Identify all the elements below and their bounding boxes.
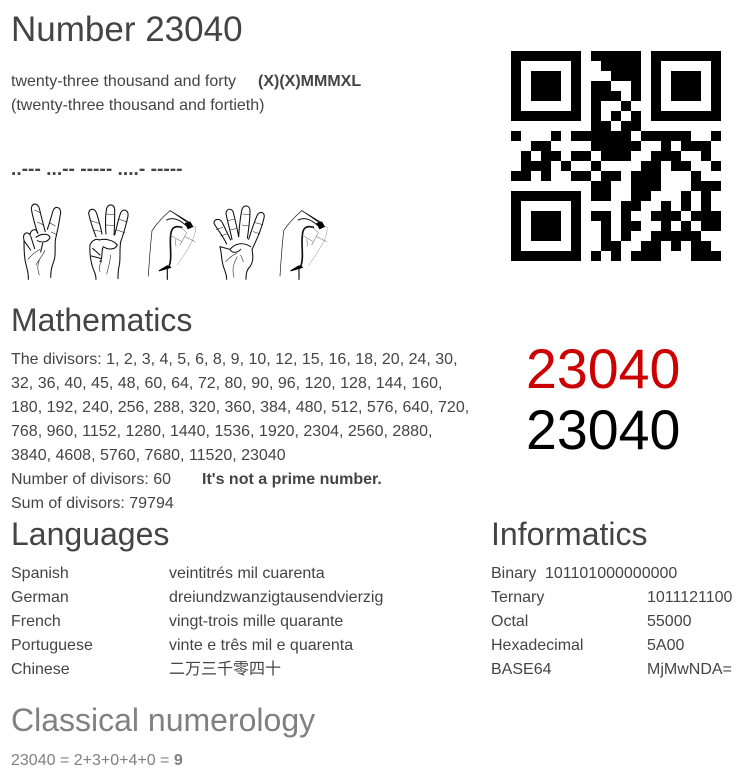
informatics table: Octal <box>491 613 528 630</box>
informatics table: 5A00 <box>647 637 684 654</box>
informatics table: BASE64 <box>491 661 551 678</box>
informatics table: Ternary <box>491 589 544 606</box>
languages table: Chinese <box>11 661 70 678</box>
languages table: German <box>11 589 69 606</box>
prime status: It's not a prime number. <box>202 471 382 488</box>
informatics table: 101101000000000 <box>545 565 677 582</box>
divisors list: 3840, 4608, 5760, 7680, 11520, 23040 <box>11 447 286 464</box>
hand sign: 2 <box>24 204 61 279</box>
hand sign: 0 (second) <box>280 211 327 279</box>
informatics table: Binary <box>491 565 536 582</box>
morse code: ..--- ...-- ----- ....- ----- <box>11 159 183 180</box>
informatics table <box>491 565 732 678</box>
QR code <box>511 51 721 261</box>
title: Number 23040 <box>11 10 243 49</box>
languages table: vingt-trois mille quarante <box>169 613 343 630</box>
languages table: veintitrés mil cuarenta <box>169 565 325 582</box>
languages table: 二万三千零四十 <box>169 661 281 678</box>
informatics table: Hexadecimal <box>491 637 583 654</box>
languages table: vinte e três mil e quarenta <box>169 637 353 654</box>
sum of divisors: Sum of divisors: 79794 <box>11 495 174 512</box>
numerology sum: 23040 = 2+3+0+4+0 = 9 <box>11 752 183 769</box>
heading: Informatics: Informatics <box>491 516 647 552</box>
hand sign: 3 <box>89 205 128 279</box>
sign language hands <box>23 204 328 280</box>
number in words: twenty-three thousand and forty <box>11 73 236 90</box>
hand sign: 0 <box>148 211 195 279</box>
informatics table: 55000 <box>647 613 692 630</box>
heading: Mathematics: Mathematics <box>11 302 192 338</box>
roman numeral: (X)(X)MMMXL <box>258 73 361 90</box>
divisors list: 768, 960, 1152, 1280, 1440, 1536, 1920, 2304, 2560, 2880, <box>11 423 432 440</box>
heading: Languages: Languages <box>11 516 169 552</box>
languages table: Spanish <box>11 565 69 582</box>
languages table: French <box>11 613 61 630</box>
languages table: Portuguese <box>11 637 93 654</box>
informatics table: 1011121100 <box>647 589 732 606</box>
divisors list: The divisors: 1, 2, 3, 4, 5, 6, 8, 9, 10, 12, 15, 16, 18, 20, 24, 30, <box>11 351 458 368</box>
number of divisors: Number of divisors: 60 <box>11 471 171 488</box>
divisors list <box>11 351 469 464</box>
divisors list: 180, 192, 240, 256, 288, 320, 360, 384, 480, 512, 576, 640, 720, <box>11 399 469 416</box>
number in red: 23040 <box>526 338 680 400</box>
heading: Classical numerology: Classical numerology <box>11 702 315 738</box>
ordinal in words: (twenty-three thousand and fortieth) <box>11 97 264 114</box>
languages table: dreiundzwanzigtausendvierzig <box>169 589 383 606</box>
languages table <box>11 565 383 678</box>
number in black: 23040 <box>526 399 680 461</box>
hand sign: 4 <box>214 206 264 279</box>
divisors list: 32, 36, 40, 45, 48, 60, 64, 72, 80, 90, 96, 120, 128, 144, 160, <box>11 375 442 392</box>
informatics table: MjMwNDA= <box>647 661 732 678</box>
